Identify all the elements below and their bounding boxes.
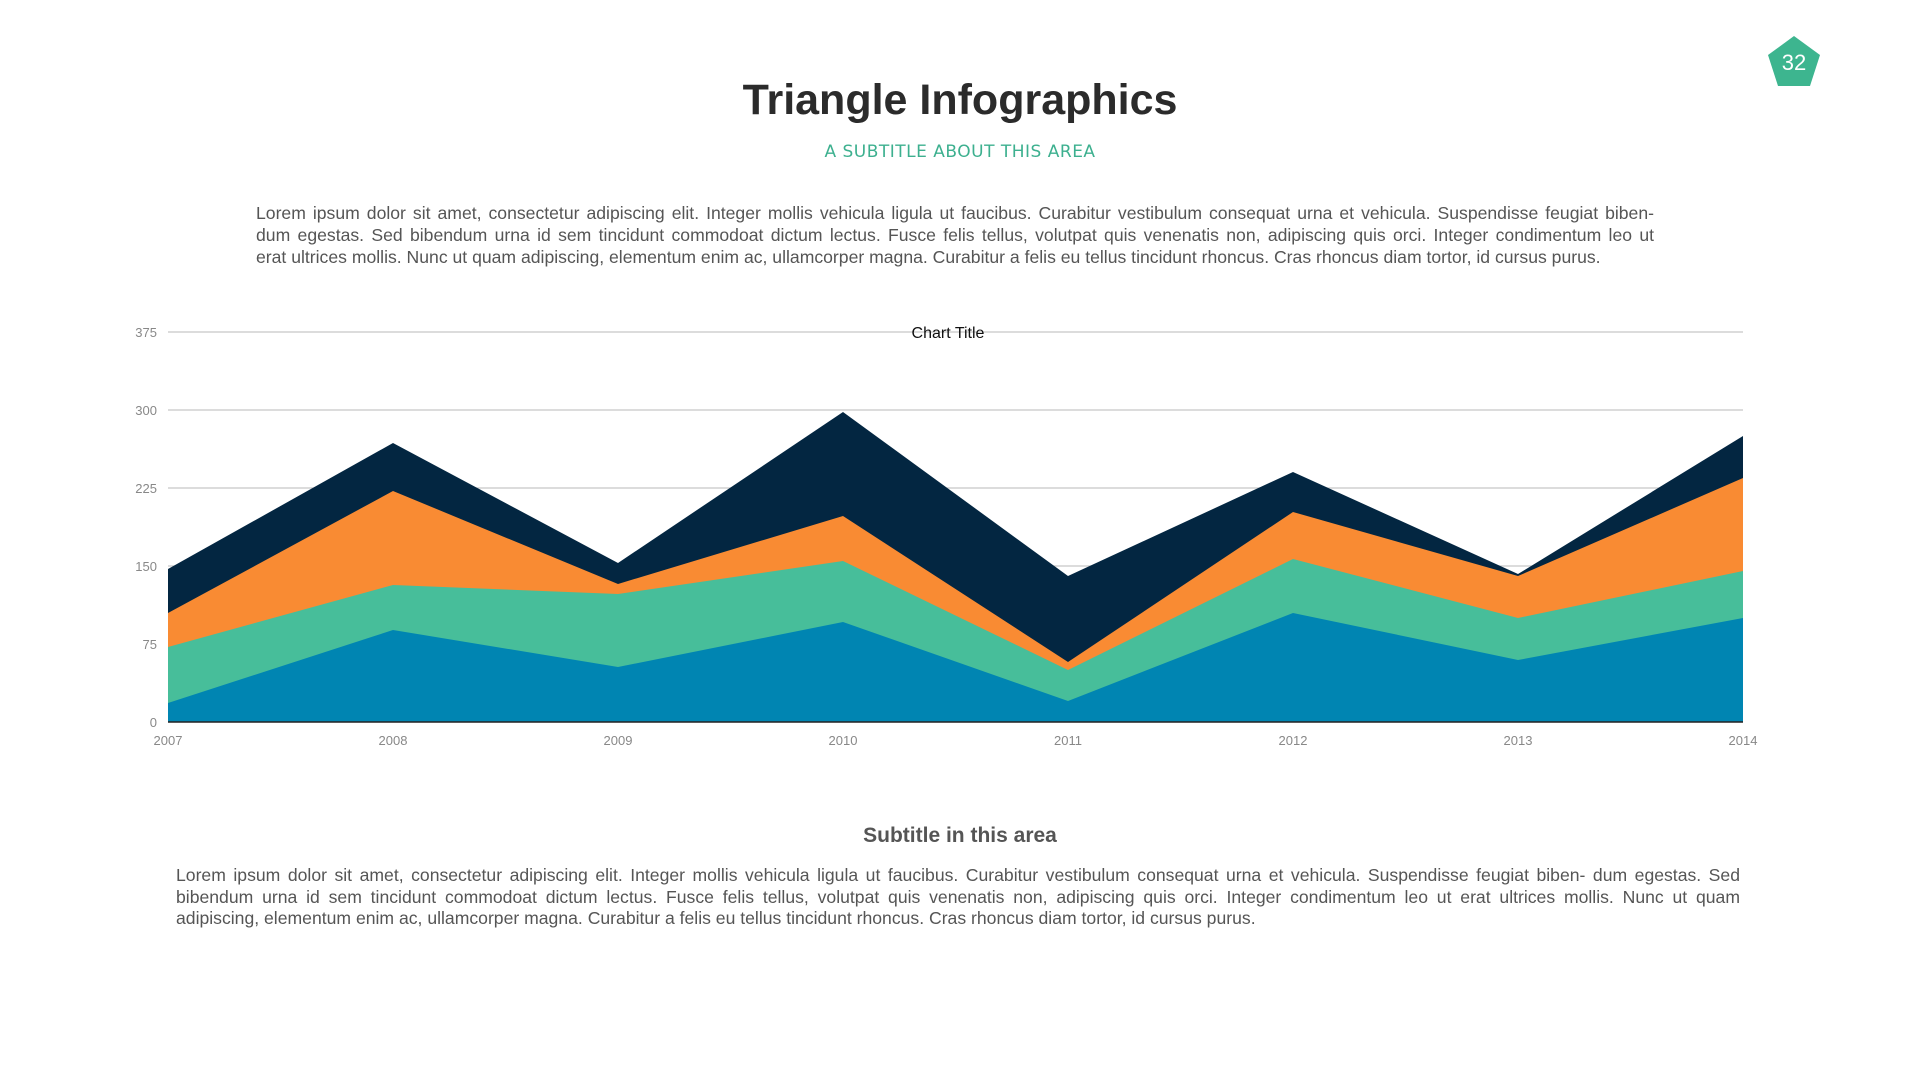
x axis labels: 2013 <box>1504 733 1532 748</box>
y axis labels: 75 <box>143 637 157 652</box>
badge: page number: 32 <box>1782 50 1806 75</box>
subtitle: A SUBTITLE ABOUT THIS AREA <box>824 142 1096 162</box>
intro paragraph: erat ultrices mollis. Nunc ut quam adipiscing, elementum enim ac, ullamcorper magna. Curabitur a felis eu tellus tincidunt rhoncus. Cras rhoncus diam tortor, id cursus purus. <box>256 247 1601 267</box>
y axis labels: 150 <box>135 559 157 574</box>
x axis labels: 2008 <box>379 733 407 748</box>
x axis labels: 2014 <box>1729 733 1757 748</box>
bottom paragraph: Lorem ipsum dolor sit amet, consectetur adipiscing elit. Integer mollis vehicula ligula ut faucibus. Curabitur vestibulum consequat urna et vehicula. Suspendisse feugiat biben- dum egestas. Sed <box>176 865 1740 885</box>
intro paragraph <box>256 203 1654 267</box>
chart title: Chart Title <box>912 325 985 342</box>
series: teal <box>168 559 1743 722</box>
y axis labels <box>135 325 157 730</box>
x axis labels: 2010 <box>829 733 857 748</box>
y axis labels: 225 <box>135 481 157 496</box>
x axis labels <box>154 733 1757 748</box>
y axis labels: 300 <box>135 403 157 418</box>
intro paragraph: dum egestas. Sed bibendum urna id sem tincidunt commodoat dictum lectus. Fusce felis tellus, volutpat quis venenatis non, adipiscing quis orci. Integer condimentum leo ut <box>256 225 1654 245</box>
series: orange <box>168 478 1743 722</box>
x axis labels: 2009 <box>604 733 632 748</box>
bottom paragraph: adipiscing, elementum enim ac, ullamcorper magna. Curabitur a felis eu tellus tincidunt rhoncus. Cras rhoncus diam tortor, id cursus purus. <box>176 908 1256 928</box>
bottom paragraph: bibendum urna id sem tincidunt commodoat dictum lectus. Fusce felis tellus, volutpat quis venenatis non, adipiscing quis orci. Integer condimentum leo ut erat ultrices mollis. Nunc ut quam <box>176 886 1740 906</box>
title: Triangle Infographics <box>743 76 1177 124</box>
series: blue <box>168 613 1743 722</box>
x axis labels: 2011 <box>1054 733 1082 748</box>
intro paragraph: Lorem ipsum dolor sit amet, consectetur adipiscing elit. Integer mollis vehicula ligula ut faucibus. Curabitur vestibulum consequat urna et vehicula. Suspendisse feugiat biben- <box>256 203 1654 223</box>
bottom subtitle: Subtitle in this area <box>863 824 1057 847</box>
x axis labels: 2012 <box>1279 733 1307 748</box>
chart: stacked area <box>135 325 1758 748</box>
x axis labels: 2007 <box>154 733 182 748</box>
badge: page number <box>1768 36 1820 86</box>
y axis labels: 0 <box>150 715 157 730</box>
bottom paragraph <box>176 865 1740 928</box>
y axis labels: 375 <box>135 325 157 340</box>
series: navy <box>168 412 1743 722</box>
